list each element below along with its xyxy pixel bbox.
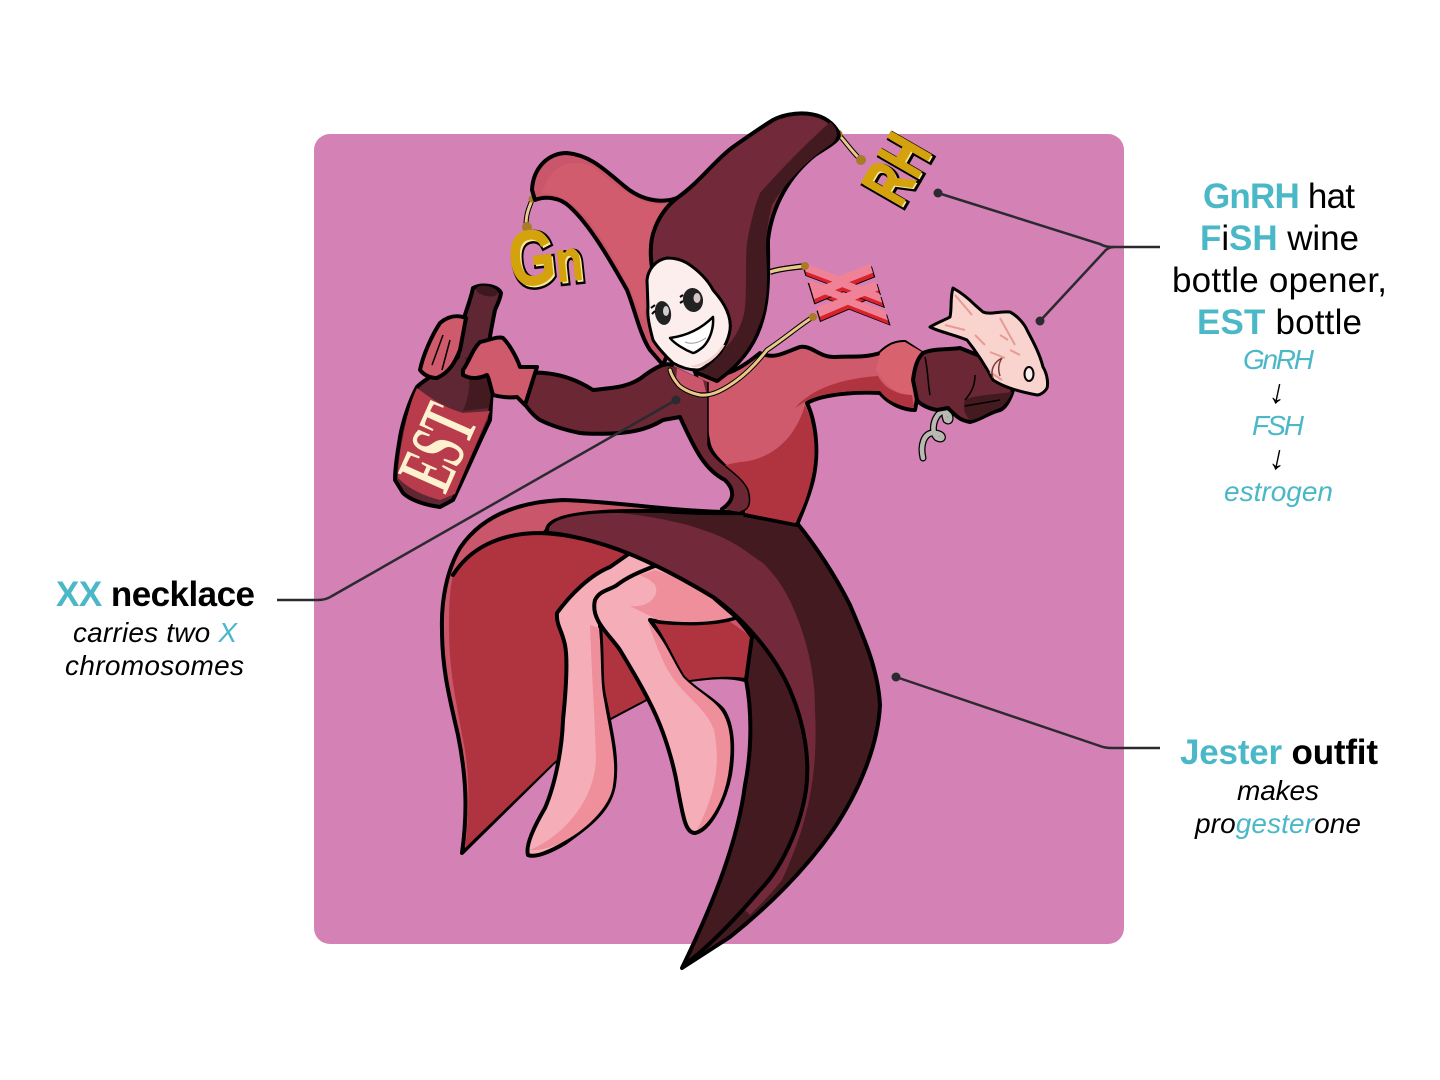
text block: XX necklace: XX necklace xyxy=(56,575,255,614)
text block: Jester outfit: progesterone xyxy=(1194,808,1361,839)
collar xyxy=(676,368,706,392)
back leg xyxy=(527,553,660,856)
back leg shading xyxy=(530,625,614,850)
face xyxy=(647,258,730,370)
bottle with hand: EST xyxy=(381,392,495,502)
text block: XX necklace: carries two X xyxy=(73,617,238,648)
text block: XX necklace xyxy=(56,575,255,681)
FiSH fish xyxy=(930,288,1048,395)
text block: XX necklace: chromosomes xyxy=(65,650,244,681)
leader line: outfit xyxy=(892,672,1160,748)
text block: GnRH hat, FiSH opener, EST bottle: GnRH hat xyxy=(1203,177,1355,216)
torso and right sleeve xyxy=(695,342,925,525)
XX charm, its cord, and RH charm: XX xyxy=(781,260,910,322)
front leg xyxy=(594,565,735,833)
text block: Jester outfit xyxy=(1180,733,1378,839)
text block: GnRH hat, FiSH opener, EST bottle: bottle opener, xyxy=(1172,261,1387,300)
corkscrew xyxy=(922,394,957,458)
hood xyxy=(651,113,839,381)
text block: Jester outfit: Jester outfit xyxy=(1180,733,1378,772)
text block: Jester outfit: makes xyxy=(1237,775,1319,806)
hat tail with Gn charm xyxy=(504,153,690,365)
panel: pink background xyxy=(314,134,1124,944)
illustration: jester character xyxy=(381,113,1048,968)
text block: hormone cascade: estrogen xyxy=(1224,476,1333,507)
XX necklace cord xyxy=(670,313,817,395)
dark drape of skirt xyxy=(453,511,880,968)
text block: GnRH hat, FiSH opener, EST bottle: FiSH wine xyxy=(1200,219,1359,258)
hat tail with Gn charm: Gn xyxy=(506,211,588,306)
text block: GnRH hat, FiSH opener, EST bottle xyxy=(1172,177,1387,342)
bottle with hand xyxy=(381,284,537,507)
front leg shading xyxy=(630,570,733,830)
skirt red layer xyxy=(442,500,760,853)
left sleeve and dark torso half xyxy=(520,364,750,512)
XX charm, its cord, and RH charm: RH xyxy=(848,122,944,215)
text block: GnRH hat, FiSH opener, EST bottle: EST bottle xyxy=(1197,303,1362,342)
text block: hormone cascade xyxy=(1224,344,1333,507)
leader line: necklace xyxy=(277,396,680,600)
text block: hormone cascade: GnRH xyxy=(1243,344,1315,375)
XX charm, its cord, and RH charm xyxy=(770,122,946,326)
leader lines: hat and fish xyxy=(934,188,1160,326)
XX charm, its cord, and RH charm: XX xyxy=(782,264,911,326)
text block: hormone cascade: ↓ xyxy=(1266,372,1290,412)
text block: hormone cascade: ↓ xyxy=(1266,438,1290,478)
glove xyxy=(913,348,1013,422)
text block: hormone cascade: FSH xyxy=(1252,410,1305,441)
hat tail with Gn charm: Gn xyxy=(504,209,586,304)
XX charm, its cord, and RH charm: RH xyxy=(850,124,946,217)
